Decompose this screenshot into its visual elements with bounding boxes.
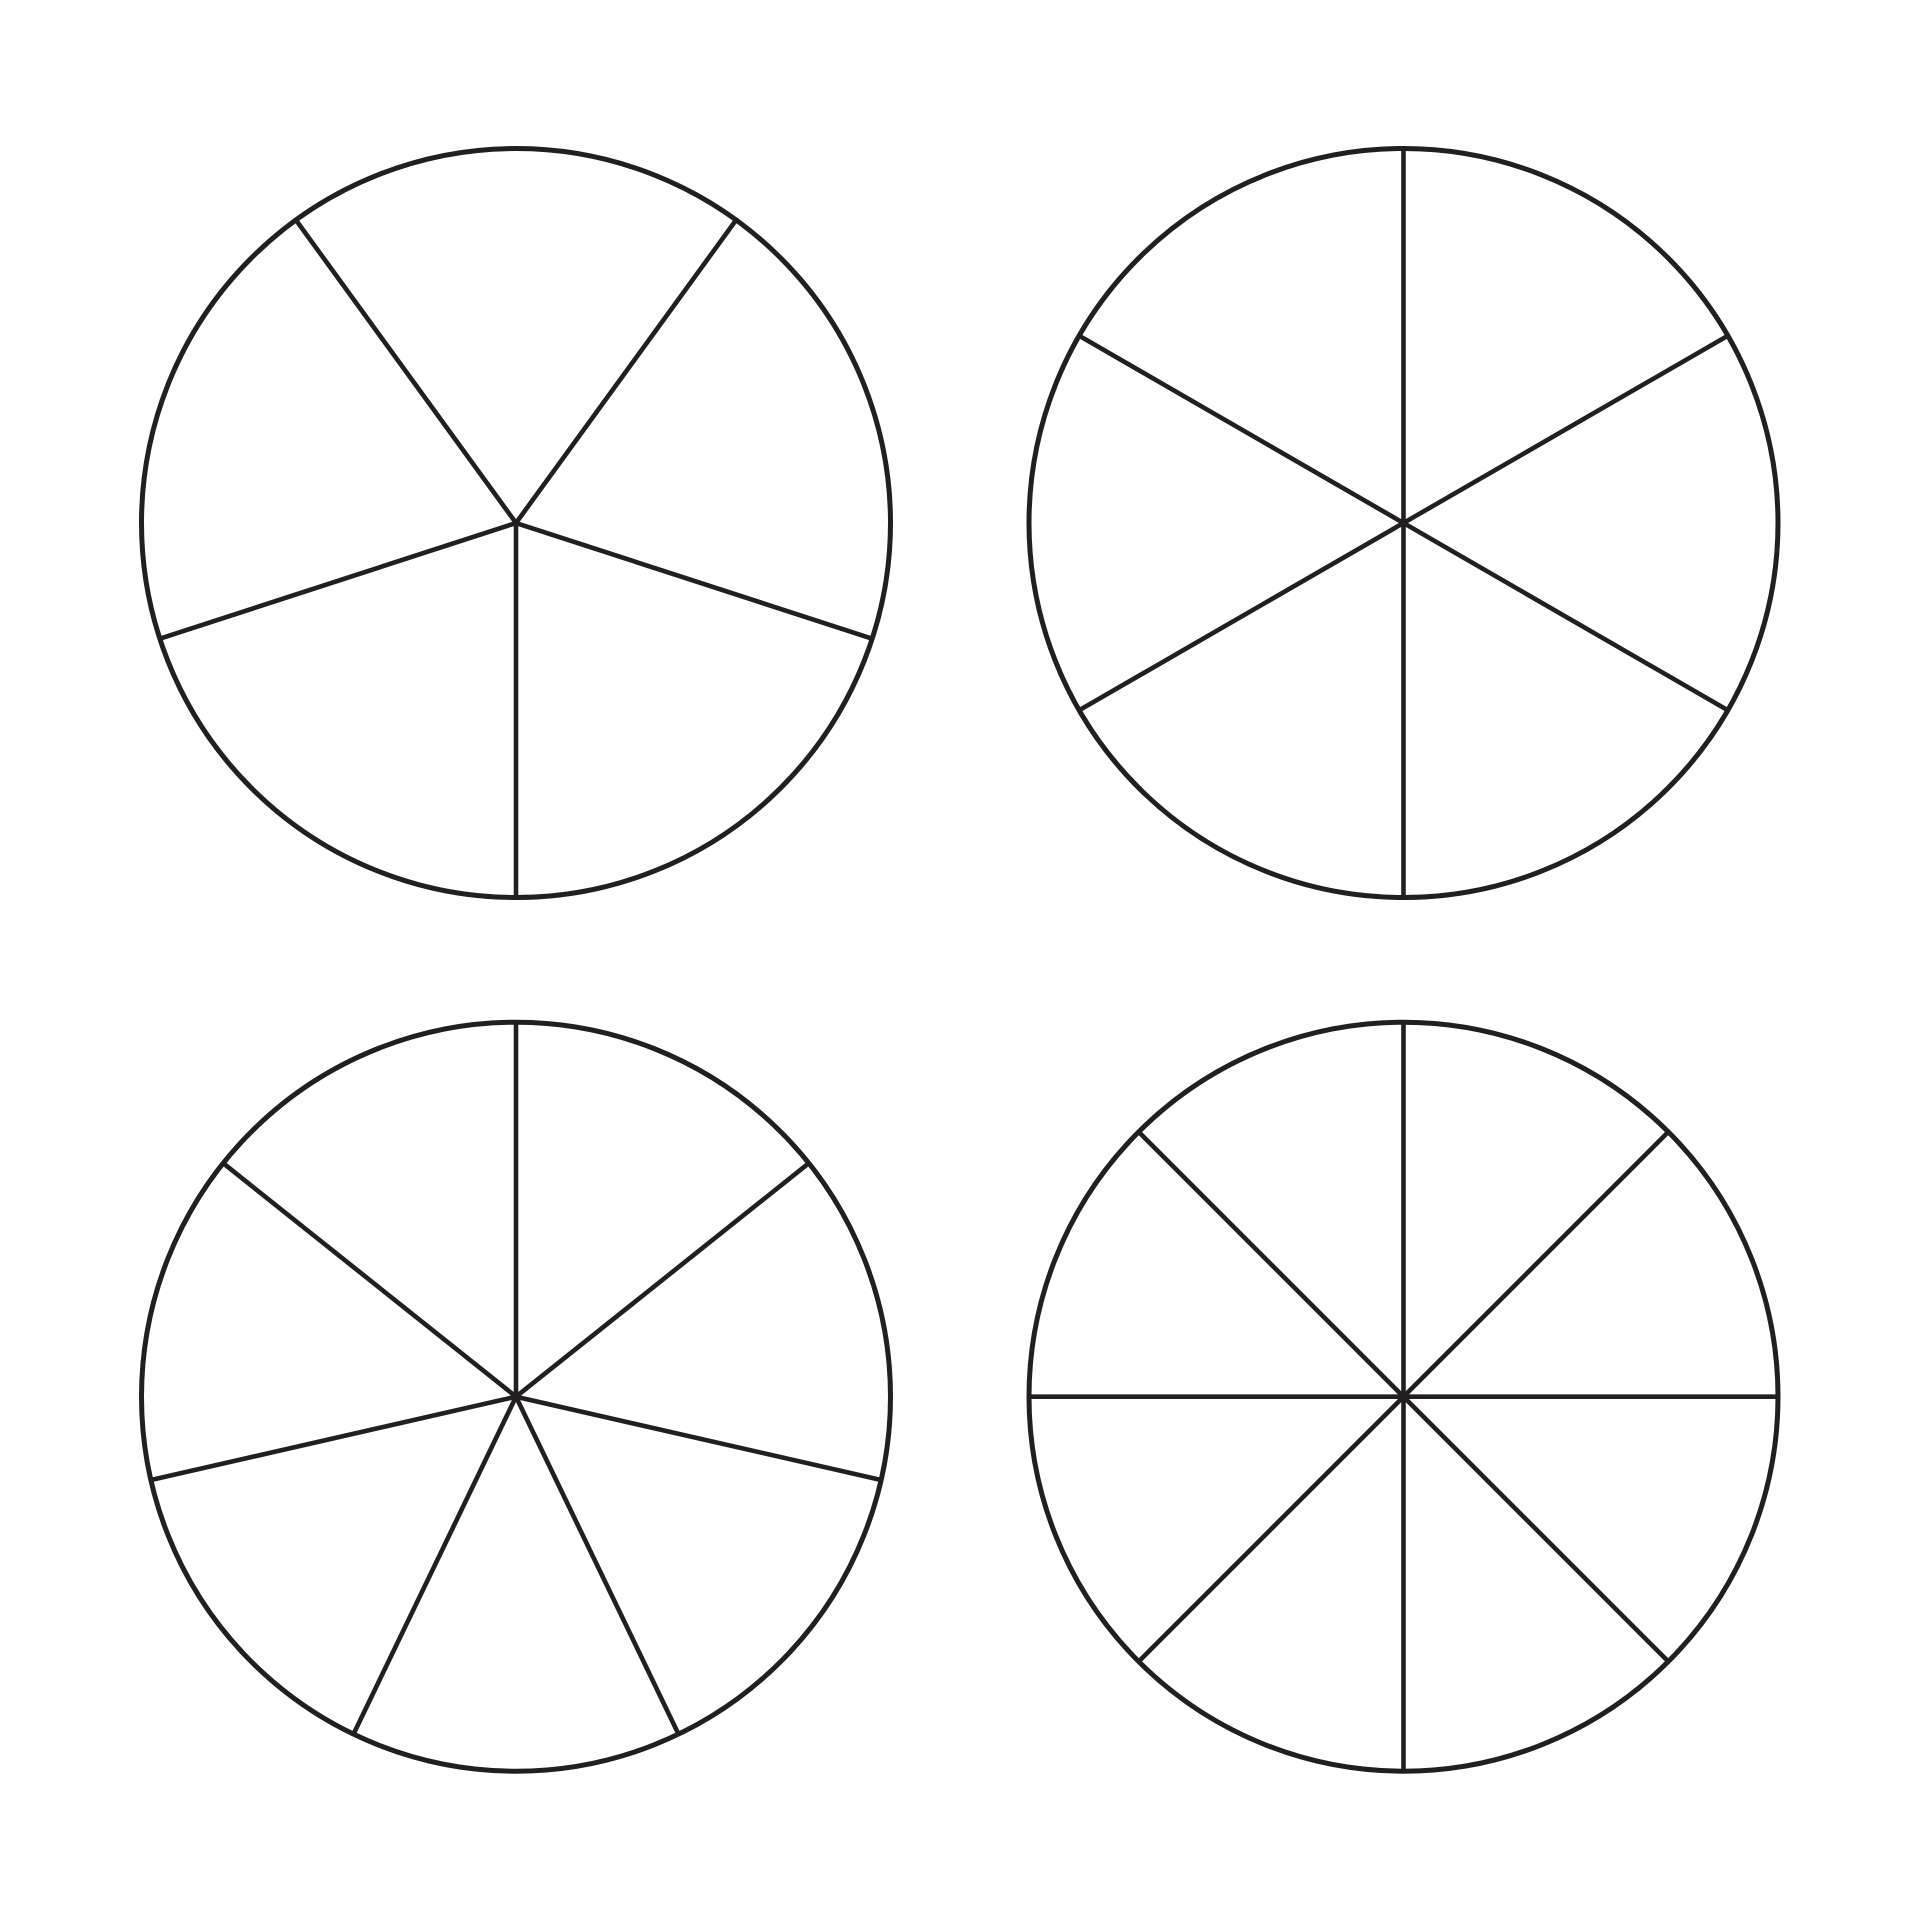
pie: circle divided into 7 segments (142, 1022, 890, 1771)
pie: circle divided into 5 segments (142, 148, 890, 898)
pie: circle divided into 8 segments (1029, 1022, 1778, 1771)
pie: circle divided into 6 segments (1029, 148, 1778, 898)
